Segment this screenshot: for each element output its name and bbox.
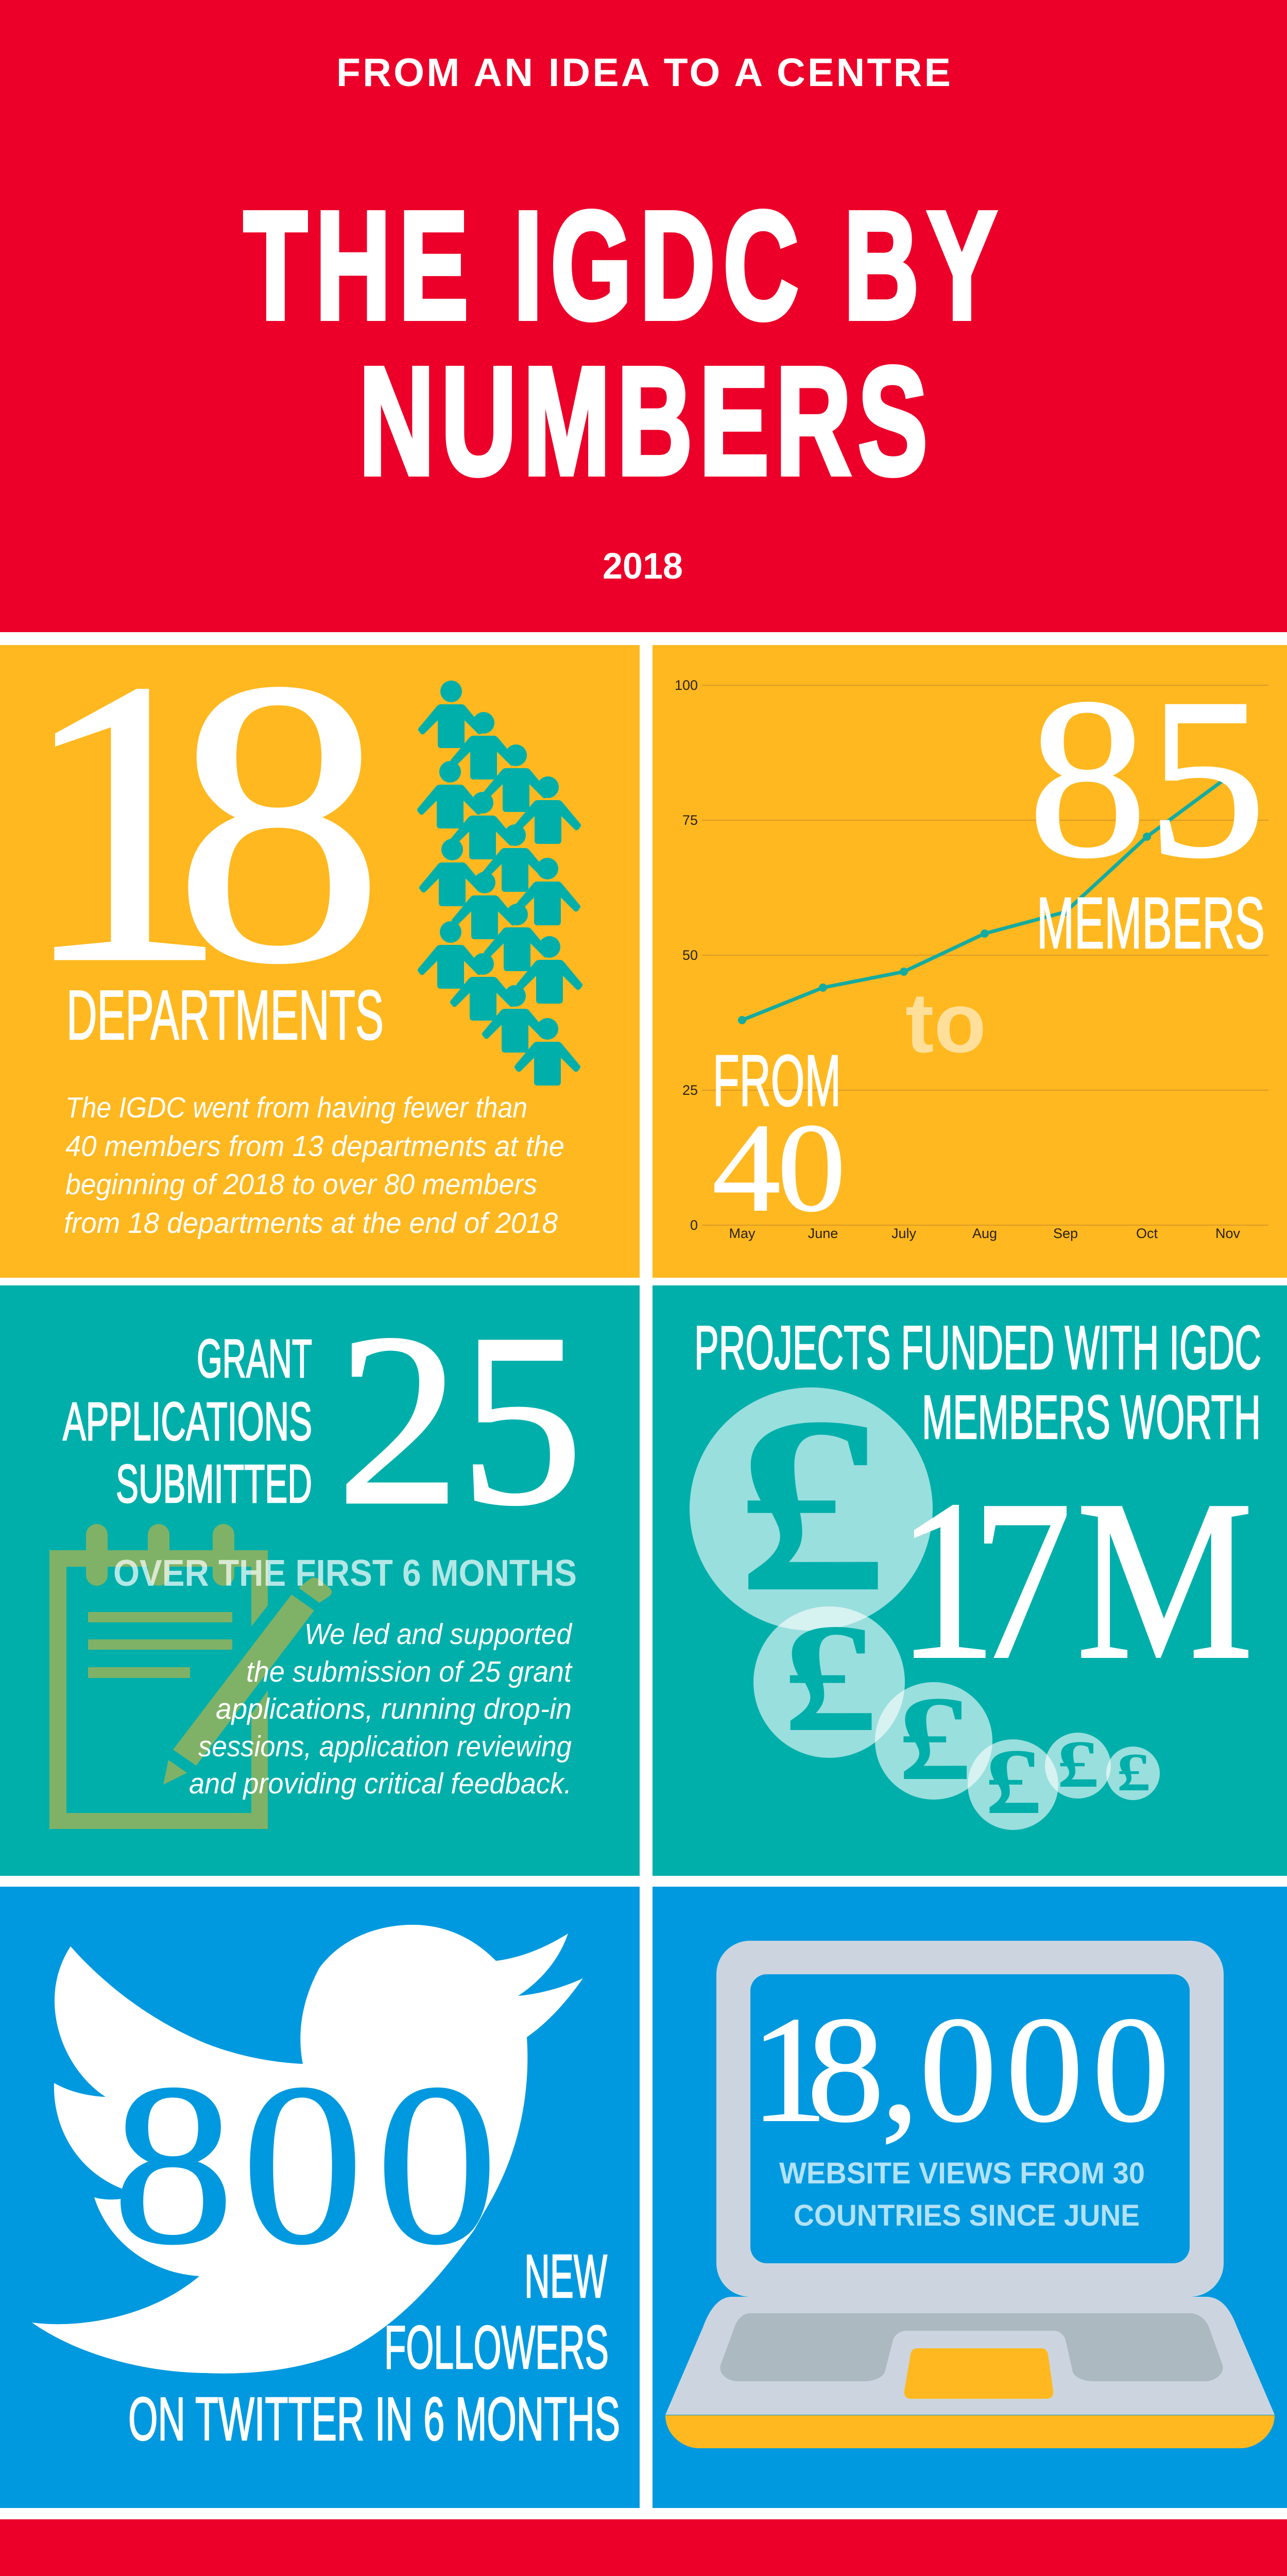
grant label	[63, 1329, 312, 1514]
grant label: SUBMITTED	[116, 1454, 312, 1514]
icon: pound coins: £	[782, 1592, 878, 1764]
icon: people group	[417, 681, 582, 1086]
subheading: OVER THE FIRST 6 MONTHS	[113, 1553, 577, 1594]
description text: 40 members from 13 departments at the	[65, 1130, 564, 1163]
big number 17M: 17M	[897, 1453, 1253, 1707]
website views caption: COUNTRIES SINCE JUNE	[794, 2199, 1140, 2232]
website views caption: WEBSITE VIEWS FROM 30	[779, 2157, 1145, 2190]
followers label: ON TWITTER IN 6 MONTHS	[128, 2385, 620, 2453]
footer band	[0, 2519, 1287, 2576]
description text: the submission of 25 grant	[246, 1655, 573, 1688]
line chart: July	[891, 1226, 917, 1241]
big number 18: 18	[19, 597, 384, 1047]
line chart	[675, 677, 1268, 1241]
number 40: 40	[712, 1098, 846, 1238]
panel: members chart	[653, 645, 1287, 1278]
followers label: FOLLOWERS	[384, 2313, 609, 2382]
description text: from 18 departments at the end of 2018	[64, 1207, 558, 1240]
line chart: 100	[675, 677, 698, 693]
line chart: 75	[682, 812, 698, 828]
icon: pound coins: £	[735, 1364, 887, 1644]
panel: projects funded	[653, 1285, 1287, 1876]
grant label: GRANT	[197, 1329, 312, 1389]
line chart: Oct	[1136, 1226, 1158, 1241]
number 800: 800	[112, 2036, 499, 2293]
followers label	[128, 2242, 620, 2453]
icon: pound coins: £	[898, 1671, 971, 1805]
line chart: 50	[682, 947, 698, 963]
subtitle: FROM AN IDEA TO A CENTRE	[336, 50, 951, 95]
description text: sessions, application reviewing	[198, 1730, 572, 1763]
big number 25: 25	[337, 1283, 583, 1556]
panel: grant applications	[0, 1283, 640, 1876]
title: THE IGDC BY	[244, 179, 1005, 351]
icon: pound coins	[690, 1364, 1160, 1834]
title	[244, 179, 1005, 506]
description text: applications, running drop-in	[216, 1692, 572, 1725]
line chart: Aug	[972, 1226, 997, 1241]
website views caption	[779, 2157, 1145, 2232]
description text: The IGDC went from having fewer than	[65, 1091, 527, 1124]
description text: We led and supported	[304, 1618, 573, 1651]
line chart: May	[729, 1226, 756, 1241]
panel: website views	[653, 1887, 1287, 2508]
grant label: APPLICATIONS	[63, 1392, 312, 1452]
panel: twitter	[0, 1887, 640, 2508]
description text: and providing critical feedback.	[189, 1767, 572, 1800]
big number 85: 85	[1028, 651, 1266, 905]
departments label: DEPARTMENTS	[66, 976, 384, 1054]
number 18,000: 18,000	[750, 1986, 1170, 2154]
followers label: NEW	[524, 2242, 607, 2311]
line chart: June	[808, 1226, 838, 1241]
from label: FROM	[713, 1040, 841, 1121]
description text	[189, 1618, 573, 1800]
line chart: Nov	[1215, 1226, 1241, 1241]
panel: departments	[0, 597, 640, 1278]
description text: beginning of 2018 to over 80 members	[65, 1168, 537, 1201]
icon: notepad and pencil	[49, 1524, 332, 1829]
icon: pound coins: £	[1117, 1742, 1151, 1802]
icon: twitter bird	[32, 1925, 583, 2374]
heading	[694, 1313, 1261, 1452]
line chart: 0	[690, 1217, 698, 1233]
line chart: Sep	[1053, 1226, 1078, 1241]
line chart: 25	[682, 1082, 698, 1098]
panel: header	[0, 0, 1287, 632]
connector word to: to	[905, 975, 986, 1070]
icon: laptop	[665, 1941, 1275, 2448]
title: NUMBERS	[359, 335, 934, 506]
year: 2018	[603, 546, 683, 587]
icon: pound coins: £	[985, 1730, 1042, 1834]
description text	[64, 1091, 564, 1240]
icon: pound coins: £	[1057, 1727, 1099, 1802]
